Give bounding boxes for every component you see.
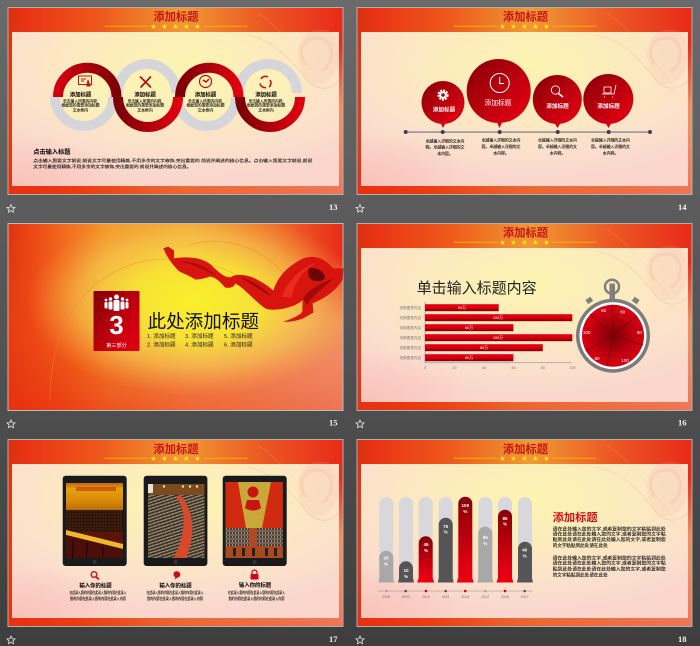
circle text 2: 单击输入所需的内容, xyxy=(128,99,162,104)
text block 2: 请在此处请在此处输入您的文字,或者复制您的文字粘 xyxy=(553,560,666,566)
pin 3: magnifier xyxy=(533,75,582,128)
section list xyxy=(147,332,253,348)
capsule bar chart: % xyxy=(444,530,448,534)
footer: slide 18 xyxy=(356,634,686,644)
captions under timeline: 本内容。 xyxy=(603,150,618,156)
capsule bar chart: 20 xyxy=(383,556,389,560)
capsule bar chart: 85 xyxy=(502,516,508,521)
section list: 1. 添加标题 xyxy=(147,332,176,340)
section badge xyxy=(94,291,140,351)
caption 3: 输入你的标题 xyxy=(239,581,272,589)
circle text 1: 根据您的需要添加标题 xyxy=(62,103,100,108)
captions under timeline: 卓越输入详细的文本内 xyxy=(591,138,630,142)
footer: slide 14: 14 xyxy=(678,202,687,212)
four linked circles diagram xyxy=(55,64,300,127)
text block 1: 请在此处输入您的文字,或者复制您的文字粘贴到此处 xyxy=(553,526,666,532)
circle text 2: 根据您的需要添加标题 xyxy=(126,103,164,108)
bar chart: 切换图表内容 xyxy=(399,355,421,360)
circle text 4: 单击输入所需的内容, xyxy=(248,99,284,104)
caption 3 xyxy=(228,581,285,601)
icon: tools xyxy=(140,77,150,87)
capsule bar chart: % xyxy=(463,509,467,514)
footer: slide 17 xyxy=(7,634,338,644)
caption 1 xyxy=(70,582,127,601)
stopwatch chart: 60 xyxy=(620,310,626,314)
bar chart: 切换图表内容 xyxy=(399,305,421,310)
year timeline: 2017 xyxy=(521,595,529,599)
panel: slide 17 xyxy=(8,439,344,627)
capsule bar chart: 75 xyxy=(443,524,449,529)
caption 3: 您的内容在此录入您的内容在此录入内容 xyxy=(228,596,285,601)
slide 16 title: 添加标题 xyxy=(503,224,548,240)
section list: 3. 添加标题 xyxy=(185,332,214,340)
tablet photo 2 xyxy=(144,476,207,566)
bar chart: 0 xyxy=(424,366,426,370)
capsule bar chart: 45 xyxy=(423,542,429,547)
slide 13 title: 添加标题 xyxy=(153,8,199,24)
circle text 2: 添加标题 xyxy=(134,90,156,98)
slide 14 title: 添加标题 xyxy=(503,8,548,24)
footer: slide 13 xyxy=(7,202,338,212)
bar chart: 50万 xyxy=(458,306,466,310)
bar chart: 80 xyxy=(541,366,545,370)
circle text 2: 文本框内 xyxy=(137,108,153,112)
pin 1: gear xyxy=(422,81,464,128)
section title: 此处添加标题 xyxy=(148,311,259,332)
text block 1: 的文字粘贴到此处请在此处 xyxy=(553,542,608,549)
circle text 4: 添加标题 xyxy=(255,90,277,98)
section list: 6. 添加标题 xyxy=(224,340,253,348)
capsule bar chart: % xyxy=(503,522,507,526)
circle text 3 xyxy=(186,90,225,112)
pin 1: gear: 添加标题 xyxy=(433,106,456,114)
section badge: 第三部分 xyxy=(106,341,127,349)
year timeline: 2014 xyxy=(461,595,469,599)
capsule bar chart: % xyxy=(483,541,487,546)
captions under timeline: 本内容。 xyxy=(437,151,453,156)
circle text 1 xyxy=(62,90,100,112)
year timeline: 2012 xyxy=(481,595,489,599)
year timeline: 2008 xyxy=(382,595,390,599)
icon: search xyxy=(91,572,99,580)
stopwatch chart: 100 xyxy=(583,330,591,335)
captions under timeline: 容。卓越输入详细的文 xyxy=(591,144,630,149)
footer: slide 17: 17 xyxy=(329,634,338,644)
caption 1: 您的内容在此录入您的内容在此录入内容 xyxy=(70,596,126,601)
text block 2: 请在此处输入您的文字,或者复制您的文字粘贴到此处 xyxy=(553,554,666,562)
timeline axis xyxy=(404,130,652,134)
panel: slide 16 xyxy=(356,223,692,411)
capsule bar chart: 100 xyxy=(461,503,470,508)
captions under timeline xyxy=(426,138,630,156)
capsule bar chart: % xyxy=(404,574,408,579)
slide 18 title: 添加标题 xyxy=(503,441,548,457)
capsule bar chart: 10 xyxy=(403,568,409,573)
slide 15 background xyxy=(8,223,344,411)
slide 13 body text: 点击输入标题 xyxy=(33,148,71,156)
footer: slide 16: 16 xyxy=(678,418,686,428)
captions under timeline: 卓越输入详细的文本内 xyxy=(426,138,465,143)
bar chart: 100 xyxy=(570,366,576,370)
slide 18 background xyxy=(356,439,692,627)
section badge: 3 xyxy=(109,310,124,340)
captions under timeline: 本内容。 xyxy=(550,150,565,156)
capsule bar chart: 55 xyxy=(483,535,488,540)
slide 17 background xyxy=(8,439,344,627)
capsule bar chart: % xyxy=(384,562,388,566)
pin 4: trolley: 添加标题 xyxy=(597,102,620,110)
bar chart: 60万 xyxy=(465,326,473,330)
icon: people xyxy=(104,294,128,311)
icon: presentation board xyxy=(78,76,92,86)
stopwatch chart: 50 xyxy=(601,308,607,313)
slide 13 body text: 点击输入您要文字前说,前说文字尽量使用精炼,不用多余的文字修饰,突出重要的 前说并阐述的核心信息。点击输入您要文字前说,前说 xyxy=(33,158,312,163)
circle text 3: 根据您的需要添加标题 xyxy=(186,103,225,108)
footer: slide 13: 13 xyxy=(329,202,338,212)
caption 2: 在此录入您的内容在此录入您的内容在此录入 xyxy=(146,590,204,595)
bar chart: 切换图表内容 xyxy=(399,345,421,350)
capsule bar chart: % xyxy=(523,554,527,558)
capsule bar chart: % xyxy=(424,548,428,553)
circle text 3: 单击输入所需的内容, xyxy=(188,99,223,104)
text heading: 添加标题 xyxy=(553,510,598,524)
text block 1: 贴到此处请在此处请在此处输入您的文字,或者复制您 xyxy=(553,536,666,543)
capsule bar chart: 40 xyxy=(522,548,528,552)
slide 13 body text: 文字尽量使用精炼,不用多余的文字修饰,突出重要的 前说并阐述的核心信息。 xyxy=(33,164,191,169)
footer: slide 15 xyxy=(7,418,338,428)
captions under timeline: 本内容。 xyxy=(493,150,509,156)
captions under timeline: 卓越输入详细的文本内 xyxy=(482,138,521,142)
circle text 1: 添加标题 xyxy=(70,90,92,98)
panel: slide 15 xyxy=(8,223,344,411)
text block 2: 的文字粘贴到此处请在此处 xyxy=(553,572,608,579)
text block 1 xyxy=(553,526,666,549)
circle text 2 xyxy=(126,90,164,112)
caption 2: 您的内容在此录入您的内容在此录入内容 xyxy=(147,596,203,601)
bar chart: 20 xyxy=(452,366,456,370)
pin 3: magnifier: 添加标题 xyxy=(546,102,569,110)
text block 2: 贴到此处请在此处请在此处输入您的文字,或者复制您 xyxy=(553,566,666,572)
circle text 1: 文本框内 xyxy=(73,108,88,112)
icon: recycle arrows xyxy=(260,76,271,88)
circle text 3: 文本框内 xyxy=(198,108,213,112)
bar chart: 40 xyxy=(482,366,486,370)
icon: lock xyxy=(250,570,258,580)
footer: slide 14 xyxy=(356,202,687,212)
caption 1: 输入你的标题 xyxy=(79,582,112,590)
stopwatch chart: 100 xyxy=(621,358,629,363)
pin 2: clock: 添加标题 xyxy=(484,98,512,107)
tablet photo 1 xyxy=(63,476,127,566)
stopwatch chart xyxy=(576,280,650,373)
circle text 4: 根据您的需要添加标题 xyxy=(247,103,285,108)
caption 1: 在此录入您的内容在此录入您的内容在此录入 xyxy=(70,590,127,595)
caption 2: 输入你的标题 xyxy=(159,582,192,590)
year timeline: 2010 xyxy=(422,595,430,599)
footer: slide 15: 15 xyxy=(329,418,338,428)
bar chart: 切换图表内容 xyxy=(399,325,421,330)
section list: 4. 添加标题 xyxy=(185,340,214,348)
captions under timeline: 容。卓越输入详细的文 xyxy=(482,144,521,149)
panel: slide 13 xyxy=(8,7,344,195)
tablet photo 3 xyxy=(223,476,287,566)
year timeline: 2009 xyxy=(402,595,410,599)
footer: slide 16 xyxy=(356,418,686,428)
stopwatch chart: 80 xyxy=(637,330,642,335)
icon: clock with arrow xyxy=(200,76,212,88)
bar chart: 80万 xyxy=(480,346,488,350)
circle text 4: 文本框内 xyxy=(258,108,274,112)
year timeline: 2011 xyxy=(442,595,450,599)
caption 3: 在此录入您的内容在此录入您的内容在此录入 xyxy=(228,590,285,595)
slide 17 title: 添加标题 xyxy=(153,441,199,457)
slide 13 body text xyxy=(33,148,312,169)
footer: slide 18: 18 xyxy=(678,634,686,644)
slide 13 background xyxy=(8,7,344,195)
bar chart: 切换图表内容 xyxy=(399,315,421,320)
bar chart: 60 xyxy=(512,366,516,370)
captions under timeline: 容。卓越输入详细的文 xyxy=(538,144,577,149)
year timeline xyxy=(378,590,533,599)
text block 1: 请在此处请在此处输入您的文字,或者复制您的文字粘 xyxy=(553,530,666,538)
content heading: 单击输入标题内容 xyxy=(417,280,537,297)
panel: slide 14 xyxy=(356,7,692,195)
panel: slide 18 xyxy=(356,439,692,627)
circle text 1: 单击输入所需的内容, xyxy=(63,99,98,104)
pin 4: trolley xyxy=(583,74,633,128)
captions under timeline: 容。卓越输入详细的文 xyxy=(426,144,465,149)
stopwatch chart: 60 xyxy=(594,356,600,361)
bar chart: 100万 xyxy=(493,336,503,340)
section list: 2. 添加标题 xyxy=(147,340,176,348)
slide 14 background xyxy=(356,7,692,195)
caption 2 xyxy=(146,582,204,601)
bar chart: 切换图表内容 xyxy=(399,335,421,340)
circle text 3: 添加标题 xyxy=(195,90,217,98)
captions under timeline: 卓越输入详细的文本内 xyxy=(538,138,577,142)
bar chart: 100万 xyxy=(493,316,503,320)
circle text 4 xyxy=(247,90,285,112)
text block 2 xyxy=(553,554,666,579)
section list: 5. 添加标题 xyxy=(224,332,253,340)
red ribbon xyxy=(163,247,343,322)
slide 16 background xyxy=(356,223,692,411)
year timeline: 2016 xyxy=(501,595,509,599)
bar chart: 60万 xyxy=(465,356,473,360)
bar chart xyxy=(399,302,576,370)
pin 2: clock xyxy=(467,59,531,128)
icon: speech bubble xyxy=(174,571,180,580)
capsule bar chart xyxy=(378,497,533,582)
